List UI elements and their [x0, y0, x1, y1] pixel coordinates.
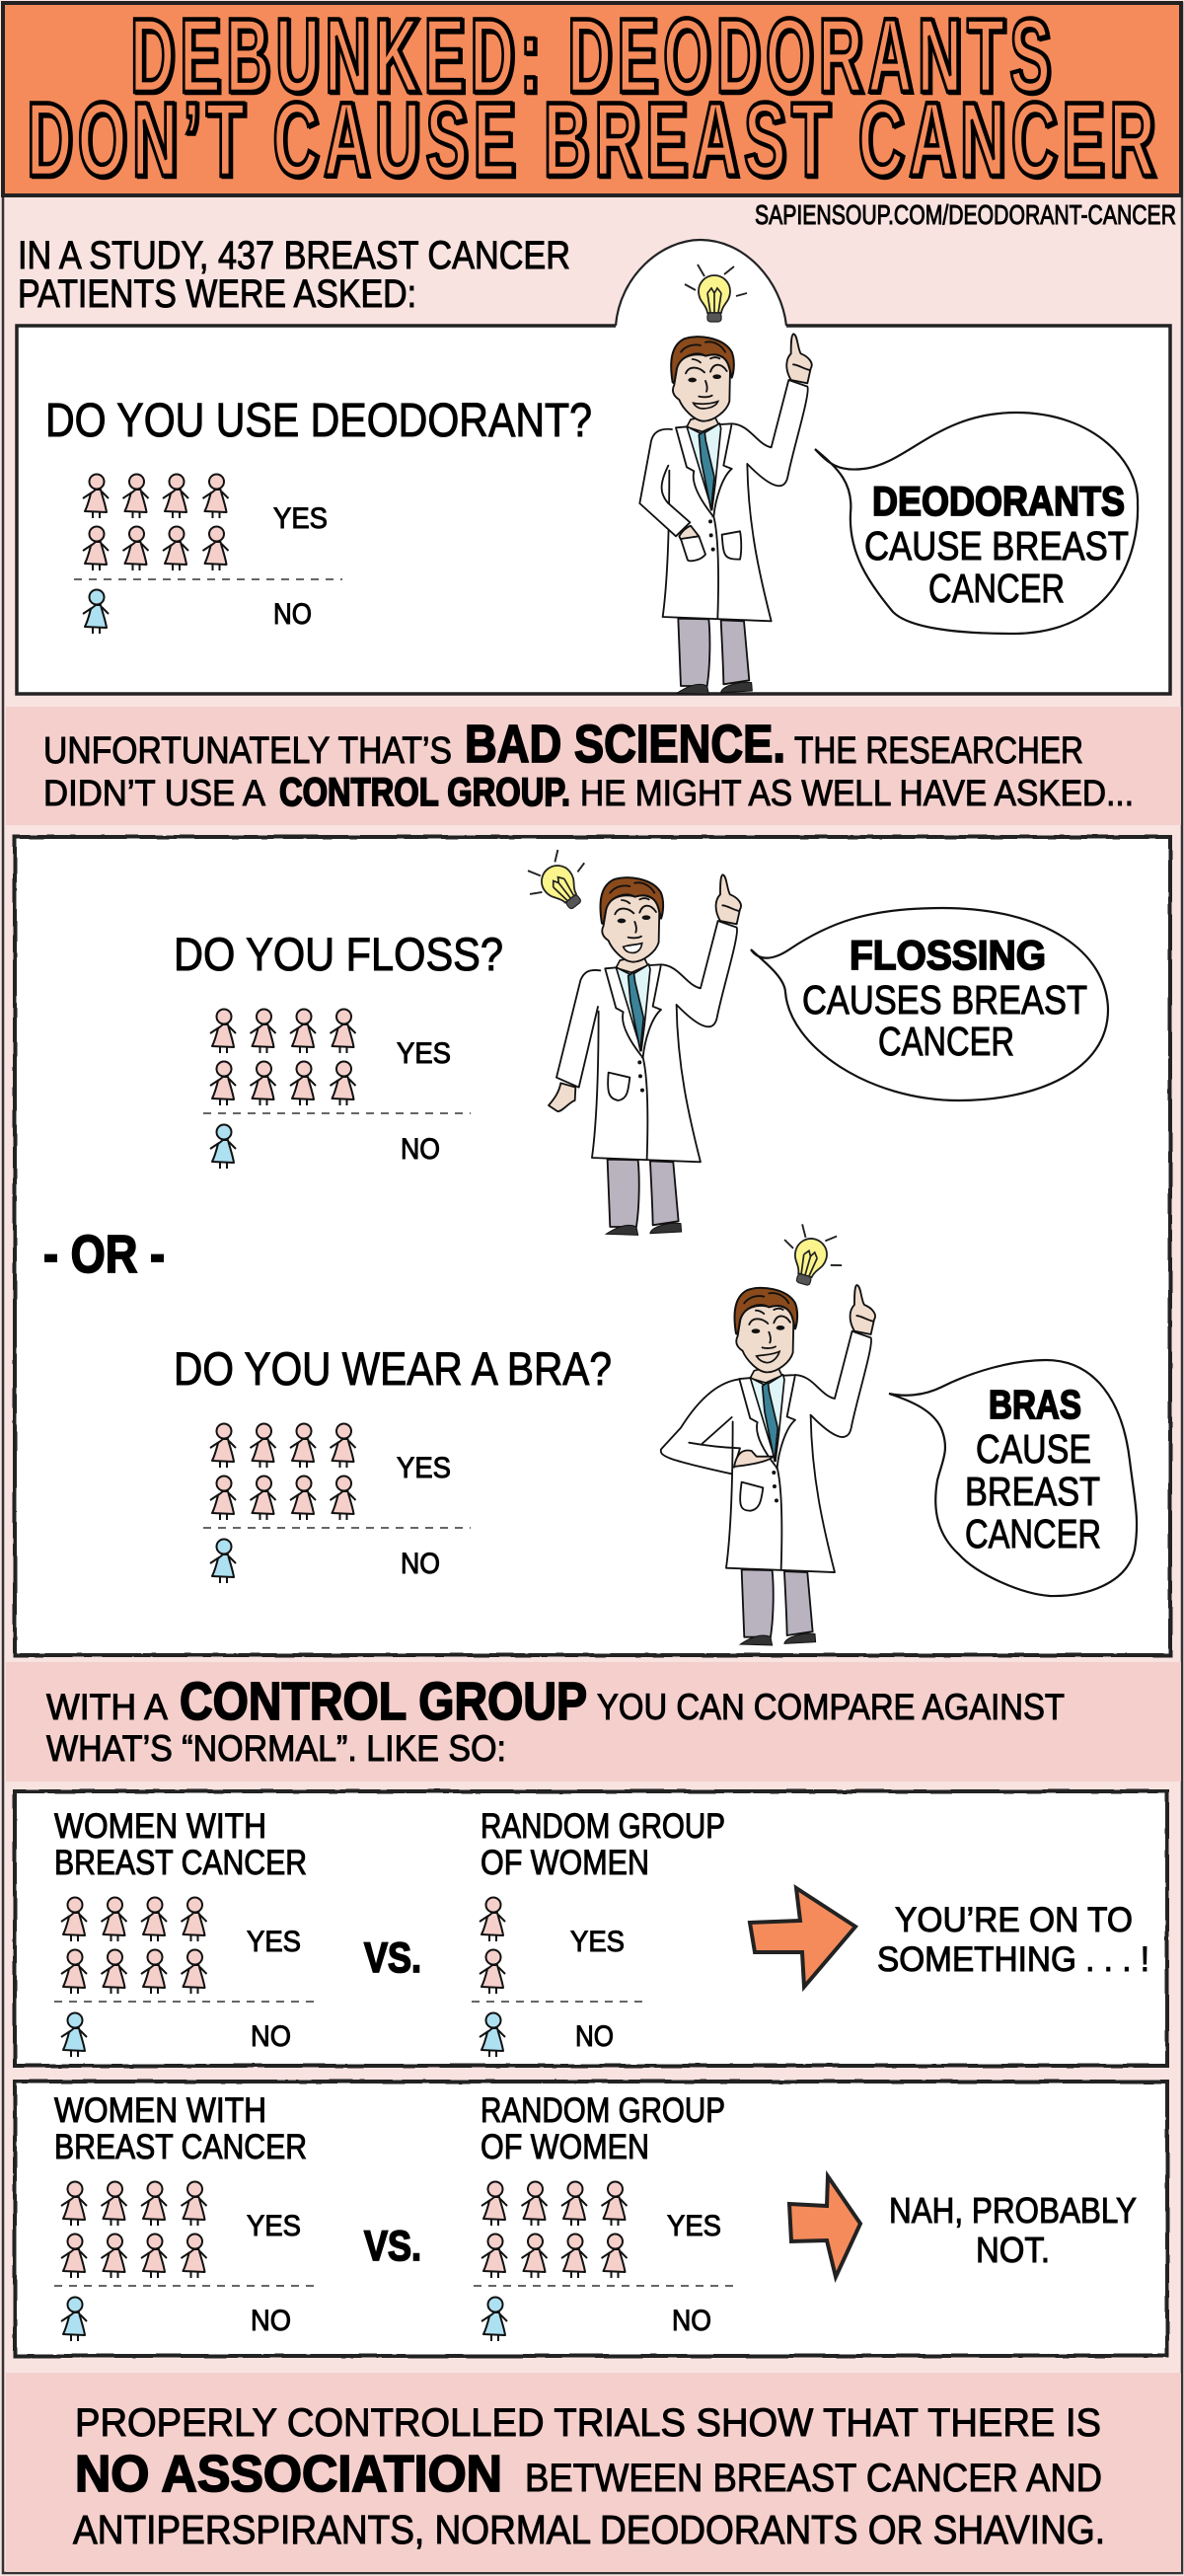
band: control group explanation: CONTROL GROUP	[180, 1672, 587, 1731]
pictogram: random group	[472, 1897, 647, 2057]
speech bubble: flossing	[751, 908, 1108, 1100]
band: conclusion: PROPERLY CONTROLLED TRIALS SHOW THAT THERE IS	[75, 2401, 1101, 2445]
pictogram: random group: YES	[570, 1926, 625, 1958]
vs label: VS.	[364, 2223, 421, 2270]
band: bad science explanation: CONTROL GROUP.	[279, 771, 570, 814]
speech bubble: bras: BREAST	[965, 1469, 1100, 1514]
scientist pointing	[639, 334, 812, 694]
vs label: VS.	[364, 1934, 421, 1982]
pictogram: cancer group	[54, 1897, 321, 2057]
band: bad science explanation: BAD SCIENCE.	[465, 715, 785, 774]
scientist: bra	[661, 1285, 875, 1645]
speech bubble: bras: CAUSE	[976, 1426, 1091, 1472]
or divider: - OR -	[43, 1225, 165, 1284]
arrow	[789, 2176, 860, 2277]
speech bubble: bras: BRAS	[989, 1382, 1081, 1427]
pictogram: bra answers: NO	[401, 1548, 440, 1580]
pictogram: random group	[474, 2181, 740, 2341]
question: floss: DO YOU FLOSS?	[174, 928, 503, 980]
pictogram: floss answers: NO	[401, 1133, 440, 1166]
band: control group explanation: WITH A	[46, 1687, 168, 1727]
question text: DO YOU USE DEODORANT?	[45, 395, 592, 447]
group heading: women with breast cancer	[54, 2091, 307, 2166]
group heading: women with breast cancer: WOMEN WITH	[54, 2091, 266, 2130]
group heading: women with breast cancer: WOMEN WITH	[54, 1807, 266, 1846]
speech bubble	[815, 413, 1138, 634]
group heading: random group: OF WOMEN	[481, 2128, 649, 2166]
group heading: random group	[481, 2091, 725, 2166]
title banner	[3, 0, 1181, 198]
icon: light bulb	[518, 840, 602, 924]
pictogram: bra answers: YES	[397, 1452, 451, 1484]
pictogram: cancer group	[54, 2181, 321, 2341]
group heading: random group: OF WOMEN	[481, 1844, 649, 1882]
pictogram: cancer group: YES	[247, 2210, 301, 2242]
group heading: women with breast cancer: BREAST CANCER	[54, 1844, 307, 1882]
group heading: random group: RANDOM GROUP	[481, 1807, 725, 1846]
conclusion text	[889, 2190, 1137, 2270]
conclusion text: NOT.	[976, 2230, 1050, 2270]
speech bubble: flossing: FLOSSING	[850, 932, 1046, 978]
icon: light bulb	[775, 1221, 850, 1293]
speech bubble: bras	[889, 1360, 1137, 1596]
panel: floss and bra questions	[15, 837, 1170, 1655]
panel: deodorant question	[17, 240, 1170, 694]
scientist: flossing	[549, 874, 741, 1235]
speech bubble: bras: CANCER	[965, 1511, 1101, 1556]
pictogram: random group: YES	[667, 2210, 721, 2242]
pictogram: cancer group: NO	[251, 2305, 291, 2337]
band: conclusion: ANTIPERSPIRANTS, NORMAL DEODORANTS OR SHAVING.	[73, 2507, 1105, 2552]
band: bad science explanation: HE MIGHT AS WELL HAVE ASKED...	[580, 773, 1134, 813]
band: control group explanation: WHAT’S “NORMAL”. LIKE SO:	[46, 1728, 506, 1769]
intro text: IN A STUDY, 437 BREAST CANCER	[18, 234, 570, 277]
band: conclusion: NO ASSOCIATION	[75, 2446, 502, 2503]
conclusion text: YOU’RE ON TO	[895, 1901, 1133, 1939]
pictogram: yes and no answers	[74, 474, 342, 634]
band: control group explanation	[6, 1662, 1181, 1781]
band: bad science explanation	[6, 707, 1181, 825]
question: bra: DO YOU WEAR A BRA?	[174, 1342, 612, 1395]
pictogram: cancer group: YES	[247, 1926, 301, 1958]
conclusion text	[877, 1901, 1149, 1979]
pictogram: random group: NO	[575, 2020, 614, 2053]
speech bubble: flossing: CANCER	[878, 1019, 1014, 1064]
band: conclusion	[6, 2373, 1181, 2572]
speech bubble: CAUSE BREAST	[864, 523, 1129, 568]
group heading: random group	[481, 1807, 725, 1882]
panel: comparison with a real difference	[15, 1791, 1167, 2066]
intro text	[18, 234, 570, 316]
group heading: women with breast cancer: BREAST CANCER	[54, 2128, 307, 2166]
speech bubble: DEODORANTS	[872, 478, 1125, 524]
band: bad science explanation: DIDN’T USE A	[43, 773, 265, 813]
icon: light bulb	[685, 265, 747, 322]
conclusion text: NAH, PROBABLY	[889, 2190, 1137, 2231]
pictogram: bra answers	[203, 1423, 471, 1583]
panel: comparison with no difference	[15, 2082, 1167, 2356]
intro text: PATIENTS WERE ASKED:	[18, 272, 416, 316]
conclusion text: SOMETHING . . . !	[877, 1940, 1149, 1979]
band: bad science explanation: THE RESEARCHER	[794, 730, 1083, 772]
group heading: women with breast cancer	[54, 1807, 307, 1882]
pictogram: floss answers: YES	[397, 1037, 451, 1070]
speech bubble: CANCER	[928, 566, 1065, 611]
band: conclusion: BETWEEN BREAST CANCER AND	[525, 2457, 1102, 2500]
arrow	[750, 1888, 855, 1987]
group heading: random group: RANDOM GROUP	[481, 2091, 725, 2130]
pictogram: cancer group: NO	[251, 2020, 291, 2053]
pictogram: floss answers	[203, 1009, 471, 1169]
speech bubble: flossing: CAUSES BREAST	[802, 977, 1087, 1023]
pictogram: random group: NO	[672, 2305, 711, 2337]
band: bad science explanation: UNFORTUNATELY THAT’S	[43, 730, 452, 772]
pictogram: yes and no answers: YES	[273, 502, 328, 535]
pictogram: yes and no answers: NO	[273, 598, 312, 631]
band: control group explanation: YOU CAN COMPARE AGAINST	[597, 1687, 1065, 1727]
